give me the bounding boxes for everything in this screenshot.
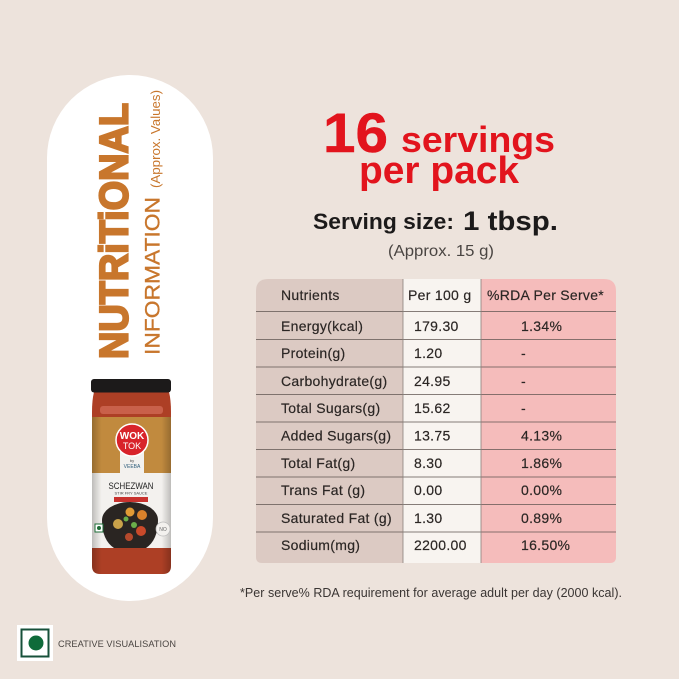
row: protein: 1.20: [414, 345, 442, 361]
table grid lines: [256, 279, 616, 563]
row: total sugars: Total Sugars(g): [281, 400, 380, 416]
row: protein: [281, 345, 526, 361]
row: energy: Energy(kcal): [281, 318, 363, 334]
orange sauce band: [92, 417, 171, 474]
icon: sauce jar: STIR FRY SAUCE: [115, 490, 148, 496]
heading: servings per pack: per pack: [359, 150, 520, 192]
jar glass body: [92, 392, 171, 574]
no badge: [156, 522, 170, 536]
header row: [281, 287, 604, 303]
row: sodium: [281, 537, 570, 553]
jar highlight: [100, 406, 163, 414]
serving size: 1 tbsp.: [463, 206, 558, 236]
jar lid: [91, 379, 171, 392]
row: sodium: Sodium(mg): [281, 537, 360, 553]
title: nutritional information: [92, 90, 164, 359]
heading: servings per pack: servings: [401, 119, 555, 160]
row: total fat: 1.86%: [521, 455, 562, 471]
serving size: [313, 206, 558, 236]
creative visualisation note: CREATIVE VISUALISATION: [58, 639, 176, 649]
row: trans fat: [281, 482, 562, 498]
row: saturated fat: 0.89%: [521, 510, 562, 526]
row: saturated fat: [281, 510, 562, 526]
per 100 g column: [403, 279, 481, 563]
header row: %RDA Per Serve*: [487, 287, 604, 303]
row: total fat: Total Fat(g): [281, 455, 355, 471]
brand logo: TOK: [123, 441, 141, 451]
title: nutritional information: NUTRiTiONAL: [92, 103, 136, 359]
product name: SCHEZWAN: [108, 481, 154, 492]
row: energy: 1.34%: [521, 318, 562, 334]
row: total fat: 8.30: [414, 455, 442, 471]
title: nutritional information: INFORMATION: [142, 197, 164, 355]
heading: servings per pack: [323, 101, 555, 192]
icon: vegetarian mark: [17, 625, 53, 661]
row: sodium: 16.50%: [521, 537, 570, 553]
row: sodium: 2200.00: [414, 537, 467, 553]
row: carbohydrate: 24.95: [414, 373, 451, 389]
white logo tab: [120, 445, 144, 473]
row: protein: Protein(g): [281, 345, 345, 361]
row: saturated fat: 1.30: [414, 510, 442, 526]
brand logo: by: [130, 458, 134, 463]
brand logo: VEEBA: [124, 464, 141, 470]
nutrient column: [256, 279, 403, 563]
row: carbohydrate: -: [521, 373, 526, 389]
row: trans fat: Trans Fat (g): [281, 482, 365, 498]
title: nutritional information: (Approx. Values): [148, 90, 163, 188]
row: total sugars: -: [521, 400, 526, 416]
row: trans fat: 0.00%: [521, 482, 562, 498]
row: added sugars: 4.13%: [521, 428, 562, 444]
row: total fat: [281, 455, 562, 471]
icon: sauce jar: NO: [159, 527, 167, 533]
glass edge shading: [92, 417, 171, 574]
serving weight: (Approx. 15 g): [388, 243, 494, 260]
row: trans fat: 0.00: [414, 482, 442, 498]
row: saturated fat: Saturated Fat (g): [281, 510, 392, 526]
row: energy: 179.30: [414, 318, 459, 334]
footnote: *Per serve% RDA requirement for average adult per day (2000 kcal).: [240, 586, 622, 600]
header row: Per 100 g: [408, 287, 471, 303]
row: energy: [281, 318, 562, 334]
red label strip: [114, 497, 148, 502]
brand logo: WOK: [120, 431, 145, 442]
white product label: [92, 473, 171, 548]
row: added sugars: [281, 428, 562, 444]
nutrition table: [256, 279, 616, 563]
heading: servings per pack: 16: [323, 101, 388, 164]
icon: sauce jar: [91, 379, 171, 574]
row: carbohydrate: [281, 373, 526, 389]
RDA column: [481, 279, 616, 563]
row: protein: -: [521, 345, 526, 361]
row: added sugars: Added Sugars(g): [281, 428, 391, 444]
panel: white pill: [47, 75, 213, 601]
veg mark: [95, 524, 103, 532]
row: total sugars: [281, 400, 526, 416]
row: total sugars: 15.62: [414, 400, 451, 416]
brand logo: [116, 424, 148, 470]
header row: Nutrients: [281, 287, 340, 303]
row: added sugars: 13.75: [414, 428, 451, 444]
row: carbohydrate: Carbohydrate(g): [281, 373, 387, 389]
serving size: Serving size:: [313, 209, 454, 234]
food bowl: [102, 502, 158, 548]
